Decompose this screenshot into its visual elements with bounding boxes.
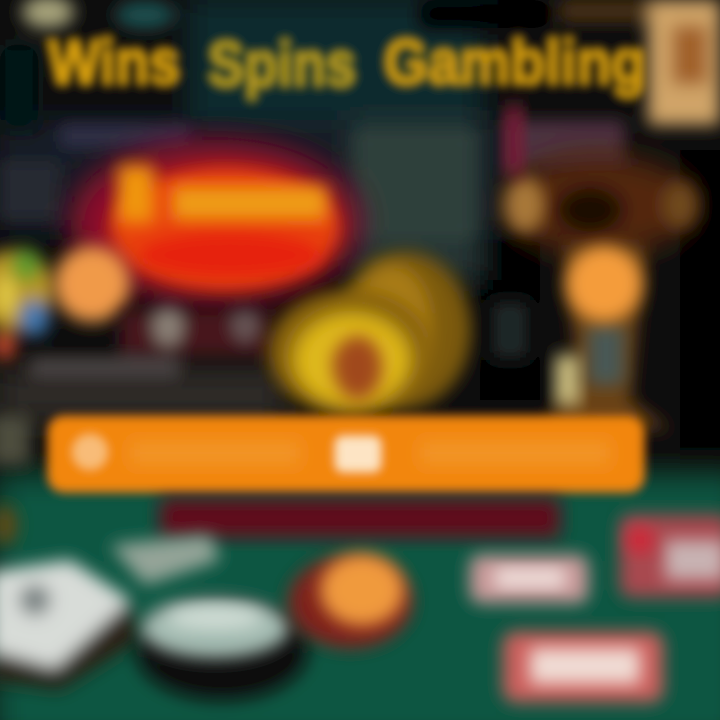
title bbox=[48, 26, 646, 100]
orange button bar bbox=[48, 416, 644, 492]
card: white left bbox=[0, 415, 220, 690]
label: bottom right bbox=[503, 632, 663, 702]
panel: dark text columns bbox=[0, 120, 625, 360]
icon: gold coin bbox=[268, 252, 471, 414]
top corner decorations bbox=[0, 0, 720, 130]
dark red strip below bar bbox=[160, 498, 560, 538]
chip: round teal and white bbox=[136, 598, 308, 700]
chip: orange centre bbox=[288, 554, 412, 648]
maroon strip bbox=[30, 306, 270, 378]
title: Wins bbox=[48, 26, 180, 98]
label: red white centre right bbox=[470, 555, 588, 603]
title: Spins bbox=[208, 28, 356, 100]
icon: orange circle left bbox=[54, 246, 130, 322]
red oval banner bbox=[70, 140, 360, 304]
title: Gambling bbox=[384, 26, 646, 98]
table chips and cards bbox=[0, 415, 720, 702]
trophy bbox=[505, 105, 698, 430]
label: top right bbox=[620, 515, 720, 597]
icon: colour wheel left bbox=[0, 248, 54, 359]
